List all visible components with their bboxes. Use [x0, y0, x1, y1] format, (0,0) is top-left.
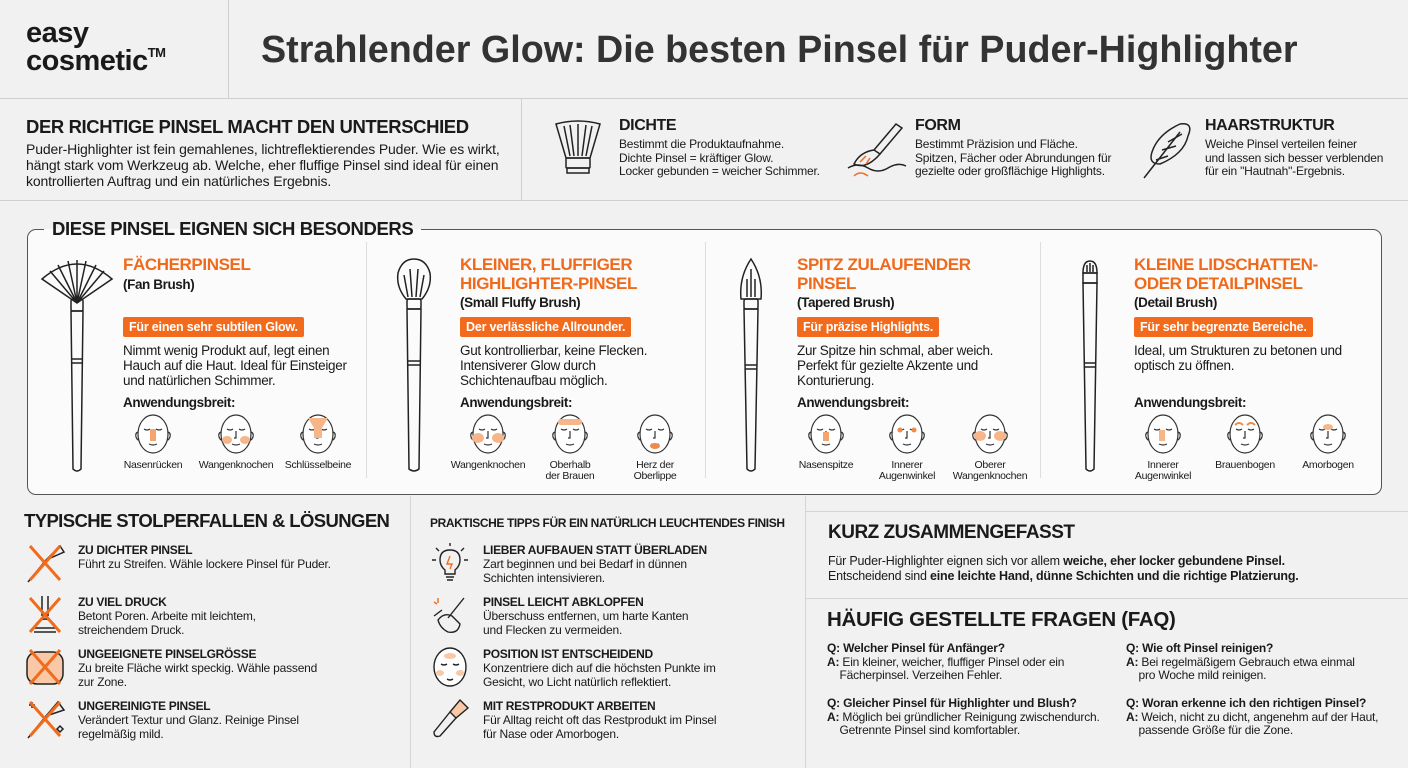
- tip 4: Für Alltag reicht oft das Restprodukt im Pinsel: [483, 713, 716, 727]
- text: Oberlippe: [634, 470, 676, 482]
- text block: [1134, 255, 1318, 310]
- icon: feather: [1144, 123, 1191, 178]
- text: Augenwinkel: [879, 470, 935, 482]
- DICHTE text: Locker gebunden = weicher Schimmer.: [619, 164, 820, 178]
- pitfall 2: Betont Poren. Arbeite mit leichtem,: [78, 609, 256, 623]
- card: fan brush: [40, 255, 347, 472]
- HAARSTRUKTUR text: Weiche Pinsel verteilen feiner: [1205, 137, 1357, 151]
- section: pitfalls: TYPISCHE STOLPERFALLEN & LÖSUNGEN: [24, 510, 389, 531]
- text block: [797, 255, 971, 310]
- HAARSTRUKTUR text: und lassen sich besser verblenden: [1205, 150, 1383, 164]
- faq 4: A: Weich, nicht zu dicht, angenehm auf der Haut,: [1126, 710, 1378, 724]
- card: detail brush: [1082, 255, 1342, 472]
- intro text block: Puder-Highlighter ist fein gemahlenes, lichtreflektierendes Puder. Wie es wirkt, hängt stark vom Werkzeug ab. Welche, eher fluffige Pinsel sind ideal für einen kontrollierten Auftrag und ein natürliches Ergebnis.: [26, 141, 500, 189]
- tip 1: LIEBER AUFBAUEN STATT ÜBERLADEN: [483, 543, 707, 557]
- text: Brauenbogen: [1215, 459, 1275, 471]
- tag: Für einen sehr subtilen Glow.: [129, 320, 298, 334]
- text block: ODER DETAILPINSEL: [1134, 274, 1303, 293]
- text: Oberhalb: [550, 459, 590, 471]
- pitfall 3: UNGEEIGNETE PINSELGRÖSSE: [78, 647, 256, 661]
- brush illustration: fan: [40, 260, 114, 472]
- panel heading: DIESE PINSEL EIGNEN SICH BESONDERS: [52, 218, 413, 239]
- tip 3: Konzentriere dich auf die höchsten Punkte im: [483, 661, 716, 675]
- FAQ: [827, 608, 1378, 737]
- logo: easy: [26, 17, 89, 49]
- faq 1: A: Ein kleiner, weicher, fluffiger Pinsel oder ein: [827, 654, 1064, 668]
- card: fluffy brush: [396, 255, 647, 472]
- pitfall 2: streichendem Druck.: [78, 622, 184, 636]
- pitfall 1: [28, 543, 331, 582]
- tip 2: PINSEL LEICHT ABKLOPFEN: [483, 595, 643, 609]
- card: tapered brush: Anwendungsbreit:: [797, 395, 909, 410]
- tip 2: und Flecken zu vermeiden.: [483, 622, 622, 636]
- brush illustration: tapered: [740, 258, 762, 472]
- pitfall 3: Zu breite Fläche wirkt speckig. Wähle passend: [78, 661, 317, 675]
- icon: form brush: [848, 123, 906, 177]
- description: Gut kontrollierbar, keine Flecken. Intensiverer Glow durch Schichtenaufbau möglich.: [460, 343, 647, 388]
- text: Amorbogen: [1302, 459, 1354, 471]
- FORM text: [915, 117, 1112, 178]
- description: Nimmt wenig Produkt auf, legt einen Hauch auf die Haut. Ideal für Einsteiger und natürlichen Schimmer.: [123, 343, 347, 388]
- description: Zur Spitze hin schmal, aber weich. Perfekt für gezielte Akzente und Konturierung.: [797, 343, 993, 388]
- pitfall 1: Führt zu Streifen. Wähle lockere Pinsel für Puder.: [78, 557, 331, 571]
- face icons with labels: [135, 414, 1346, 454]
- text block: KLEINER, FLUFFIGER: [460, 255, 632, 274]
- faq 4: [1126, 696, 1378, 737]
- FORM text: Spitzen, Fächer oder Abrundungen für: [915, 150, 1111, 164]
- text: Wangenknochen: [451, 459, 525, 471]
- tip 3: Gesicht, wo Licht natürlich reflektiert.: [483, 674, 671, 688]
- text: Oberer: [975, 459, 1005, 471]
- tip 1: [432, 543, 707, 584]
- text: Innerer: [1147, 459, 1179, 471]
- logo: [26, 17, 166, 77]
- text block: (Tapered Brush): [797, 295, 894, 310]
- text block: HIGHLIGHTER-PINSEL: [460, 274, 637, 293]
- text: Schlüsselbeine: [285, 459, 351, 471]
- text: Augenwinkel: [1135, 470, 1191, 482]
- pitfall 1: ZU DICHTER PINSEL: [78, 543, 192, 557]
- text block: [460, 255, 637, 310]
- card: tapered brush: [740, 255, 993, 472]
- tag: [797, 317, 939, 337]
- faq 2: pro Woche mild reinigen.: [1139, 668, 1266, 682]
- text: Wangenknochen: [199, 459, 273, 471]
- faq 1: [827, 641, 1064, 682]
- text block: (Detail Brush): [1134, 295, 1217, 310]
- tag: [460, 317, 631, 337]
- brush illustration: detail: [1082, 260, 1098, 472]
- section: pitfalls: [24, 510, 389, 740]
- tip 1: Schichten intensivieren.: [483, 570, 605, 584]
- FORM text: Bestimmt Präzision und Fläche.: [915, 137, 1078, 151]
- summary: Entscheidend sind eine leichte Hand, dünne Schichten und die richtige Platzierung.: [828, 569, 1299, 583]
- logo: cosmeticTM: [26, 45, 166, 77]
- icon: dense brush: [555, 120, 601, 174]
- FORM text: gezielte oder großflächige Highlights.: [915, 164, 1105, 178]
- tip 4: für Nase oder Amorbogen.: [483, 726, 619, 740]
- section: tips: [430, 516, 785, 740]
- text: Innerer: [891, 459, 923, 471]
- tag: Für präzise Highlights.: [803, 320, 933, 334]
- faq 3: Q: Gleicher Pinsel für Highlighter und Blush?: [827, 696, 1077, 710]
- tip 1: Zart beginnen und bei Bedarf in dünnen: [483, 557, 687, 571]
- DICHTE text: Bestimmt die Produktaufnahme.: [619, 137, 784, 151]
- faq 3: A: Möglich bei gründlicher Reinigung zwischendurch.: [827, 710, 1100, 724]
- pitfall 3: [26, 647, 317, 688]
- DICHTE text: Dichte Pinsel = kräftiger Glow.: [619, 150, 773, 164]
- text block: [123, 255, 250, 292]
- FAQ: HÄUFIG GESTELLTE FRAGEN (FAQ): [827, 608, 1176, 631]
- faq 2: [1126, 641, 1355, 682]
- faq 3: Getrennte Pinsel sind komfortabler.: [840, 723, 1020, 737]
- summary: [828, 522, 1299, 583]
- tag: [1134, 317, 1313, 337]
- tag: Für sehr begrenzte Bereiche.: [1140, 320, 1307, 334]
- tip 4: [433, 699, 716, 740]
- faq 3: [827, 696, 1100, 737]
- text: Wangenknochen: [953, 470, 1027, 482]
- text block: (Small Fluffy Brush): [460, 295, 580, 310]
- tip 4: MIT RESTPRODUKT ARBEITEN: [483, 699, 655, 713]
- text: Nasenspitze: [799, 459, 853, 471]
- pitfall 4: UNGEREINIGTE PINSEL: [78, 699, 210, 713]
- tip 3: [433, 647, 716, 688]
- section: tips: PRAKTISCHE TIPPS FÜR EIN NATÜRLICH LEUCHTENDES FINISH: [430, 516, 785, 530]
- text block: KLEINE LIDSCHATTEN-: [1134, 255, 1318, 274]
- title: Strahlender Glow: Die besten Pinsel für Puder-Highlighter: [261, 28, 1298, 70]
- card: fan brush: Anwendungsbreit:: [123, 395, 235, 410]
- tip 2: Überschuss entfernen, um harte Kanten: [483, 609, 688, 623]
- tag: [123, 317, 304, 337]
- intro text block: [26, 116, 500, 189]
- text block: FÄCHERPINSEL: [123, 255, 250, 274]
- face labels: Nasenrücken: [124, 459, 182, 471]
- pitfall 4: regelmäßig mild.: [78, 726, 164, 740]
- FORM text: FORM: [915, 117, 961, 134]
- faq 1: Q: Welcher Pinsel für Anfänger?: [827, 641, 1005, 655]
- faq 4: passende Größe für die Zone.: [1139, 723, 1293, 737]
- pitfall 2: ZU VIEL DRUCK: [78, 595, 167, 609]
- panel: brushes: [27, 229, 1382, 495]
- faq 2: A: Bei regelmäßigem Gebrauch etwa einmal: [1126, 654, 1355, 668]
- pitfall 3: zur Zone.: [78, 674, 127, 688]
- pitfall 4: [28, 699, 299, 740]
- text block: (Fan Brush): [123, 277, 194, 292]
- summary: KURZ ZUSAMMENGEFASST: [828, 522, 1074, 543]
- description: Ideal, um Strukturen zu betonen und optisch zu öffnen.: [1134, 343, 1342, 373]
- text: der Brauen: [546, 470, 594, 482]
- card: detail brush: Anwendungsbreit:: [1134, 395, 1246, 410]
- HAARSTRUKTUR text: [1205, 117, 1383, 178]
- faq 1: Fächerpinsel. Verzeihen Fehler.: [840, 668, 1002, 682]
- card: fluffy brush: Anwendungsbreit:: [460, 395, 572, 410]
- DICHTE text: [619, 117, 820, 178]
- faq 2: Q: Wie oft Pinsel reinigen?: [1126, 641, 1273, 655]
- intro text block: DER RICHTIGE PINSEL MACHT DEN UNTERSCHIED: [26, 116, 469, 137]
- summary: Für Puder-Highlighter eignen sich vor allem weiche, eher locker gebundene Pinsel.: [828, 554, 1285, 568]
- text block: PINSEL: [797, 274, 856, 293]
- text: Herz der: [636, 459, 674, 471]
- HAARSTRUKTUR text: für ein "Hautnah"-Ergebnis.: [1205, 164, 1345, 178]
- tag: Der verlässliche Allrounder.: [466, 320, 625, 334]
- pitfall 4: Verändert Textur und Glanz. Reinige Pinsel: [78, 713, 299, 727]
- brush illustration: fluffy: [396, 258, 432, 472]
- pitfall 2: [29, 595, 256, 636]
- HAARSTRUKTUR text: HAARSTRUKTUR: [1205, 117, 1334, 134]
- tip 2: [434, 595, 688, 636]
- tip 3: POSITION IST ENTSCHEIDEND: [483, 647, 653, 661]
- faq 4: Q: Woran erkenne ich den richtigen Pinsel?: [1126, 696, 1366, 710]
- text block: SPITZ ZULAUFENDER: [797, 255, 971, 274]
- DICHTE text: DICHTE: [619, 117, 676, 134]
